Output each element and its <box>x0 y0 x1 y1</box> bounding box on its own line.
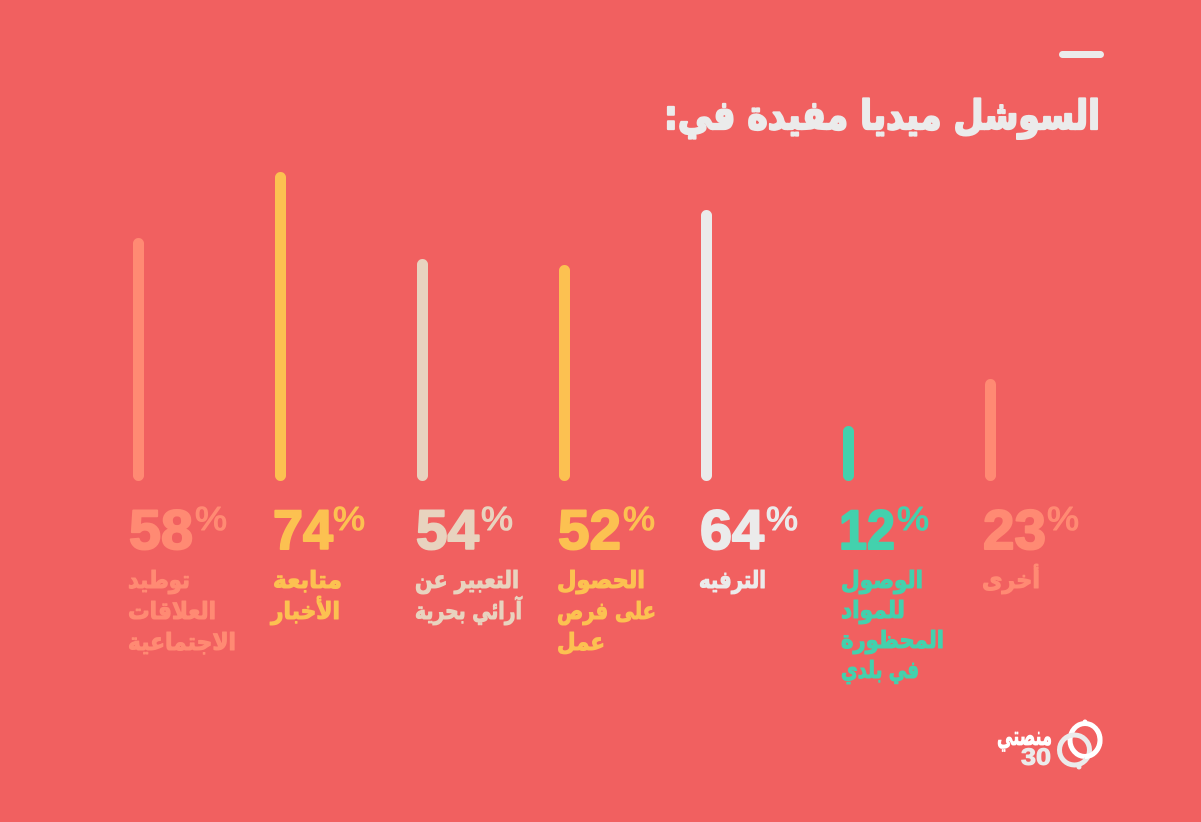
value 58%: 58 <box>129 498 193 561</box>
logo wordmark: منصتي <box>997 721 1052 752</box>
value 52%: 52 <box>558 498 621 561</box>
bar 23% <box>985 379 996 481</box>
label <box>415 566 523 625</box>
label: متابعة <box>273 566 342 594</box>
value 54%: 54 <box>416 498 479 561</box>
value 23%: 23 <box>983 498 1046 561</box>
label <box>557 566 656 656</box>
column: 52% job opportunities <box>557 265 656 656</box>
column: 54% free expression <box>415 259 523 625</box>
label <box>841 566 944 684</box>
label: الوصول <box>841 566 923 594</box>
column: 58% social relations <box>128 238 236 656</box>
bar 54% <box>417 259 428 481</box>
label: المحظورة <box>841 626 944 654</box>
label: توطيد <box>128 566 190 594</box>
value 64%: 64 <box>700 498 764 561</box>
column: 12% banned material <box>839 426 944 684</box>
bar 64% <box>701 210 712 481</box>
label: للمواد <box>841 596 905 624</box>
percent sign: % <box>481 500 513 537</box>
label: أخرى <box>982 564 1040 594</box>
label: العلاقات <box>128 597 216 625</box>
percent sign: % <box>623 500 655 537</box>
label: عمل <box>557 628 605 656</box>
bar 12% <box>843 426 854 481</box>
column: 74% following news <box>270 172 365 625</box>
label: في بلدي <box>841 656 919 684</box>
label: الحصول <box>557 566 645 594</box>
label: على فرص <box>557 597 656 625</box>
label <box>128 566 236 656</box>
percent sign: % <box>333 500 365 537</box>
label: الاجتماعية <box>128 628 236 656</box>
logo number: 30 <box>1021 744 1051 771</box>
label: الأخبار <box>270 596 340 625</box>
column: 64% entertainment <box>699 210 798 594</box>
label: التعبير عن <box>415 566 519 594</box>
title accent bar <box>1059 51 1104 58</box>
logo <box>997 720 1100 771</box>
label <box>270 566 342 625</box>
logo icon: linked rings <box>1060 720 1100 770</box>
percent sign: % <box>766 500 798 537</box>
value 12%: 12 <box>839 498 895 561</box>
label: الترفيه <box>699 566 766 594</box>
percent sign: % <box>1047 500 1079 537</box>
bar 52% <box>559 265 570 481</box>
percent sign: % <box>897 500 929 537</box>
bar 74% <box>275 172 286 481</box>
title: السوشل ميديا مفيدة في: <box>664 93 1100 139</box>
bar 58% <box>133 238 144 481</box>
label: آرائي بحرية <box>415 596 523 625</box>
percent sign: % <box>195 500 227 537</box>
value 74%: 74 <box>273 498 333 561</box>
column: 23% other <box>982 379 1079 594</box>
